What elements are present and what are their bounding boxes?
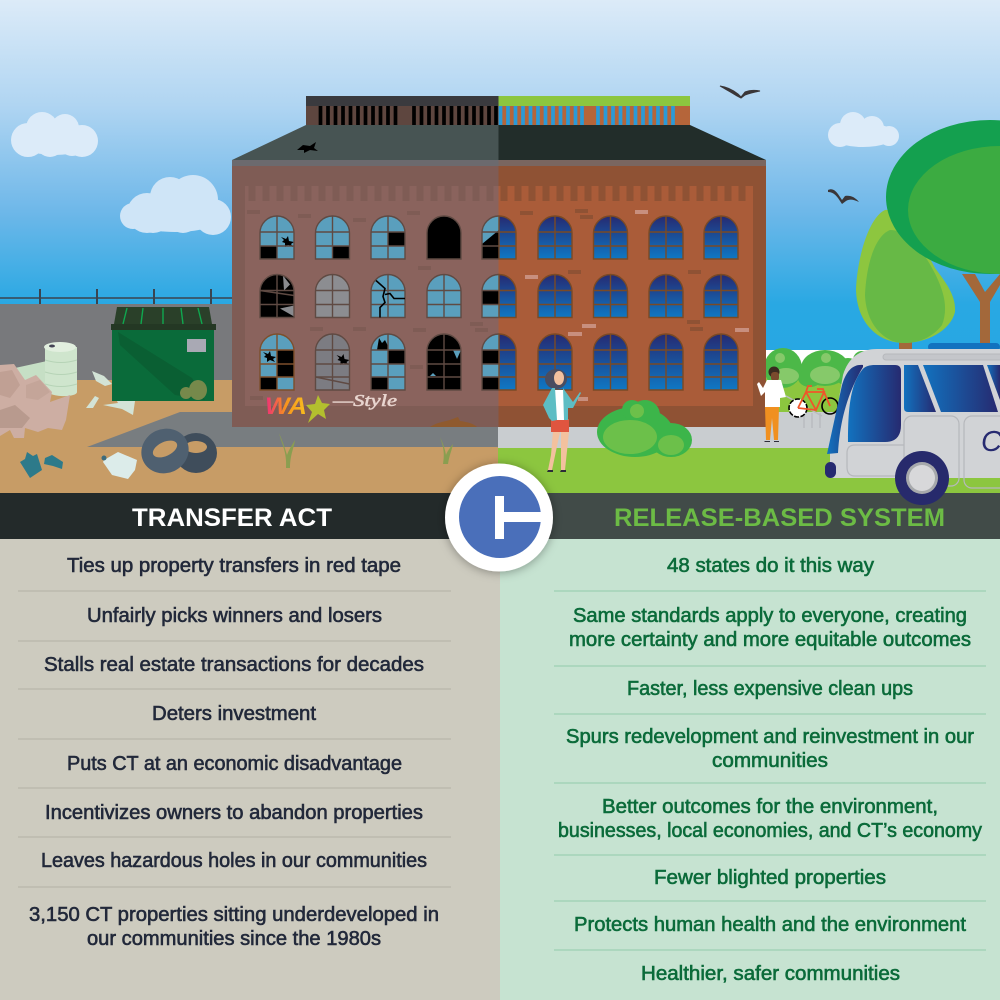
item: 3,150 CT properties sitting underdeveloped in: [29, 904, 439, 926]
item: Spurs redevelopment and reinvestment in our: [566, 726, 974, 748]
rubble pile: [0, 364, 70, 438]
loose bricks: [247, 209, 749, 401]
item: [558, 796, 982, 842]
item: Better outcomes for the environment,: [602, 796, 938, 818]
dumpster: [111, 307, 216, 401]
windows: right side: [538, 216, 738, 390]
item: [29, 904, 439, 950]
building: neglected left half and restored right half: [232, 96, 766, 427]
item: communities: [712, 750, 828, 772]
paper roll: [15, 342, 77, 396]
graffiti: WA: [265, 393, 307, 420]
man: [757, 366, 786, 442]
item: more certainty and more equitable outcomes: [569, 629, 971, 651]
heading: Release-Based System: RELEASE-BASED SYSTEM: [614, 504, 945, 532]
item: Stalls real estate transactions for decades: [44, 654, 424, 676]
cloud: middle left: [120, 175, 231, 235]
item: Puts CT at an economic disadvantage: [67, 753, 402, 775]
item: Healthier, safer communities: [641, 963, 900, 985]
item: [569, 605, 971, 651]
panel: Release-Based System list: [500, 539, 1000, 1000]
graffiti: —Style: [332, 391, 398, 410]
dirt mound: [430, 417, 477, 427]
header band: left: [0, 493, 498, 539]
gloves: [20, 452, 63, 478]
loose trash: [86, 371, 135, 415]
plastic jug: [102, 452, 137, 479]
right ground: lawn and sidewalk: [498, 375, 1000, 493]
item: Deters investment: [152, 703, 316, 725]
item: Leaves hazardous holes in our communities: [41, 850, 427, 872]
item: our communities since the 1980s: [87, 928, 381, 950]
cloud: top right: [828, 112, 899, 147]
facade: [232, 160, 766, 427]
item: [566, 726, 974, 772]
left ground: pavement and dirt: [0, 304, 498, 493]
item: Incentivizes owners to abandon properties: [45, 802, 423, 824]
heading: Transfer Act: TRANSFER ACT: [132, 504, 332, 532]
item: Ties up property transfers in red tape: [67, 555, 401, 577]
item: Same standards apply to everyone, creating: [573, 605, 967, 627]
graffiti: [265, 391, 398, 423]
windows: left side, row 2: [260, 274, 461, 318]
windows: left side, row 1: [260, 216, 461, 259]
weeds: [279, 433, 453, 468]
item: Fewer blighted properties: [654, 867, 886, 889]
bird: right: [828, 189, 859, 204]
item: 48 states do it this way: [667, 555, 874, 577]
background bushes: [764, 348, 871, 388]
panel: Transfer Act list: [0, 539, 500, 1000]
sky background: [0, 0, 1000, 350]
fence: [0, 289, 232, 304]
bird on roof: [297, 142, 318, 153]
item: Faster, less expensive clean ups: [627, 678, 913, 700]
rooftop block: [306, 96, 690, 125]
bird: top: [720, 86, 760, 98]
item: businesses, local economies, and CT’s economy: [558, 820, 982, 842]
windows: centre column split between both halves: [482, 216, 516, 390]
item: Protects human health and the environment: [574, 914, 966, 936]
header band: right: [498, 493, 1000, 539]
logo: [445, 464, 553, 572]
windows: left side, row 3: [260, 334, 461, 390]
item: Unfairly picks winners and losers: [87, 605, 382, 627]
tires: [134, 421, 217, 481]
large tree: [886, 120, 1000, 343]
woman: [543, 369, 581, 472]
cloud: top left: [11, 112, 98, 157]
bush in front of building: [597, 400, 692, 457]
roof: [232, 125, 766, 160]
bus: [825, 343, 1000, 505]
small tree: [856, 210, 955, 352]
bicycle and rack: [786, 386, 838, 428]
